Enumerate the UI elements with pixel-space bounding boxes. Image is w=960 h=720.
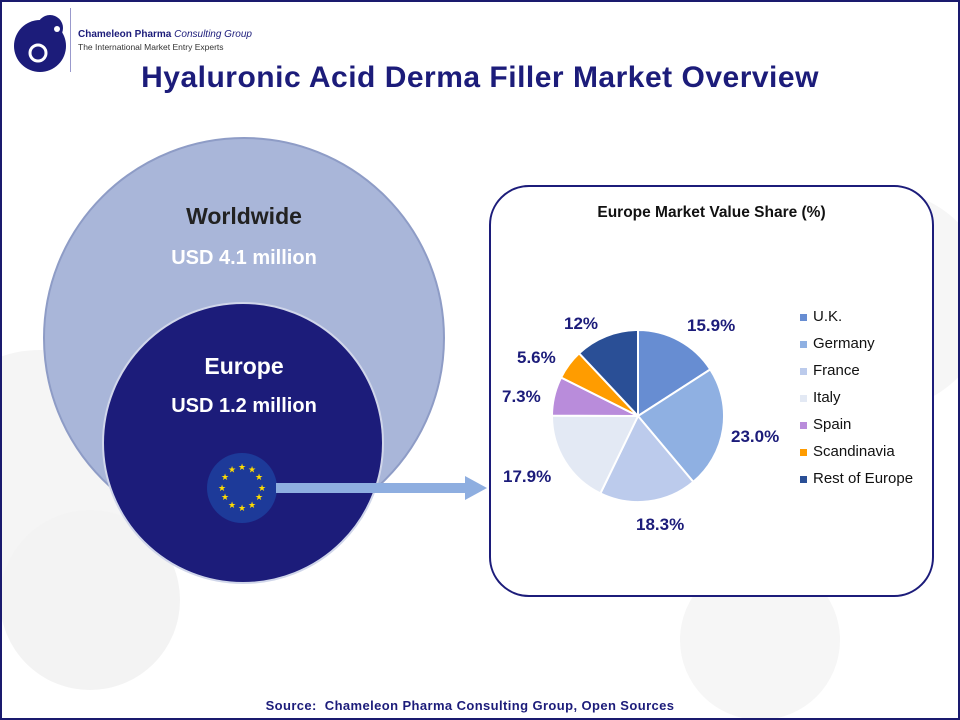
icon: EU flag: ★ <box>255 492 263 502</box>
legend: Scandinavia <box>813 443 895 460</box>
icon: EU flag: ★ <box>258 483 266 493</box>
logo: Chameleon Pharma Consulting Group <box>78 29 252 40</box>
legend: Rest of Europe <box>813 470 913 487</box>
pie chart: 15.9% <box>687 316 735 335</box>
icon: EU flag: ★ <box>248 500 256 510</box>
legend: U.K. <box>813 308 842 325</box>
title: Hyaluronic Acid Derma Filler Market Overview <box>141 61 819 94</box>
icon: EU flag: ★ <box>221 492 229 502</box>
worldwide circle <box>44 138 444 538</box>
europe label: USD 1.2 million <box>171 395 317 417</box>
pie chart: 5.6% <box>517 348 556 367</box>
icon: EU flag: ★ <box>221 472 229 482</box>
pie chart: 18.3% <box>636 515 684 534</box>
icon: EU flag: ★ <box>238 462 246 472</box>
icon: EU flag: ★ <box>218 483 226 493</box>
pie chart: 12% <box>564 314 598 333</box>
worldwide label <box>171 203 317 269</box>
icon: EU flag: ★ <box>238 503 246 513</box>
icon: EU flag: ★ <box>248 464 256 474</box>
icon: EU flag <box>207 453 276 523</box>
icon: EU flag: ★ <box>255 472 263 482</box>
legend: Spain <box>813 416 851 433</box>
pie chart: 17.9% <box>503 467 551 486</box>
worldwide label: USD 4.1 million <box>171 247 317 269</box>
legend <box>800 308 913 487</box>
pie chart: 23.0% <box>731 427 779 446</box>
logo: The International Market Entry Experts <box>78 42 224 52</box>
logo <box>14 8 252 72</box>
legend: Germany <box>813 335 875 352</box>
icon: EU flag: ★ <box>228 464 236 474</box>
europe label: Europe <box>204 353 284 379</box>
worldwide label: Worldwide <box>186 203 302 229</box>
circles <box>43 137 445 584</box>
europe circle <box>103 303 383 583</box>
legend: Italy <box>813 389 841 406</box>
icon: EU flag: ★ <box>228 500 236 510</box>
europe label <box>171 353 317 417</box>
source: Source: Chameleon Pharma Consulting Group, Open Sources <box>266 698 674 713</box>
arrow <box>276 476 487 500</box>
pie chart: 7.3% <box>502 387 541 406</box>
panel: europe market share <box>489 185 934 597</box>
chart title: Europe Market Value Share (%) <box>597 204 826 221</box>
legend: France <box>813 362 860 379</box>
